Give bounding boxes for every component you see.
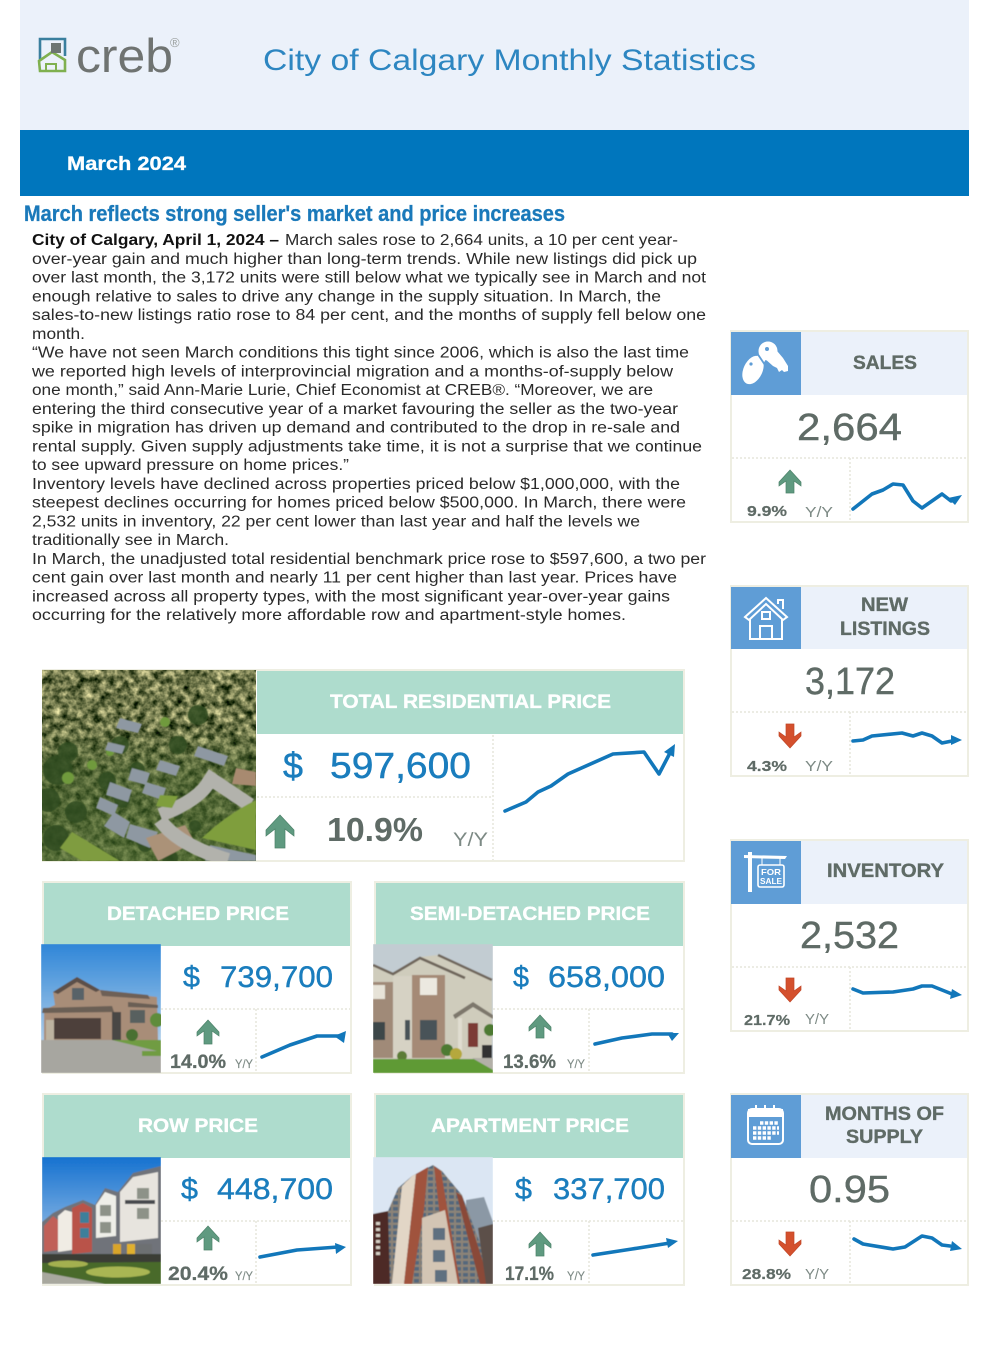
change value: 9.9%	[747, 503, 787, 520]
article text: increased across all property types, with the most significant year-over-year gains	[32, 588, 670, 605]
icon: up arrow	[197, 1226, 219, 1250]
icon: down arrow	[779, 1232, 801, 1256]
date bar	[20, 130, 969, 196]
change value: Y/Y	[567, 1269, 585, 1283]
change value	[168, 1264, 253, 1285]
panel: inventory	[731, 840, 968, 1031]
price value: $	[283, 745, 303, 786]
photo: apartment tower	[373, 1157, 493, 1284]
article text: we reported high levels of interprovincial migration and a months-of-supply below	[31, 363, 674, 380]
value: 0.95	[809, 1169, 890, 1211]
icon: up arrow	[779, 470, 801, 493]
panel: new listings	[731, 586, 968, 776]
sparkline	[854, 1236, 962, 1251]
value: 2,664	[797, 407, 902, 449]
article text	[31, 232, 707, 624]
heading: MONTHS OF	[825, 1104, 944, 1125]
value: 3,172	[805, 661, 895, 703]
article text: cent gain over last month and nearly 11 per cent higher than last year. Prices have	[32, 570, 677, 586]
article text: occurring for the relatively more affordable row and apartment-style homes.	[32, 607, 626, 624]
article text: steepest declines occurring for homes priced below $500,000. In March, there were	[32, 494, 686, 512]
panel: row price	[42, 1094, 351, 1285]
price value: 597,600	[330, 745, 471, 786]
icon: up arrow	[197, 1020, 219, 1044]
heading: INVENTORY	[827, 861, 944, 882]
icon: for sale sign: SALE	[760, 876, 782, 886]
price value: 337,700	[553, 1173, 665, 1206]
article text: one month,” said Ann-Marie Lurie, Chief Economist at CREB®. “Moreover, we are	[32, 382, 653, 399]
photo: detached house	[41, 944, 164, 1073]
price value: $	[513, 961, 529, 994]
price value: $	[515, 1173, 532, 1206]
icon: down arrow	[779, 724, 801, 748]
heading: DETACHED PRICE	[107, 903, 289, 925]
article text: enough relative to sales to drive any change in the supply situation. In March, the	[32, 288, 661, 305]
report title: City of Calgary Monthly Statistics	[263, 44, 756, 77]
heading	[801, 587, 967, 649]
article text: “We have not seen March conditions this tight since 2006, which is also the last time	[32, 344, 689, 362]
heading: SALES	[853, 353, 917, 374]
article text: March sales rose to 2,664 units, a 10 per cent year-	[285, 232, 678, 249]
change value: 14.0%	[170, 1052, 226, 1073]
icon: for sale sign	[731, 841, 801, 904]
price value: 658,000	[548, 961, 665, 994]
heading	[801, 332, 967, 395]
article text: sales-to-new listings ratio rose to 84 per cent, and the months of supply fell below one	[32, 307, 706, 324]
value: 2,532	[800, 915, 899, 957]
icon: calendar	[731, 1095, 801, 1158]
icon: for sale sign: FOR	[761, 867, 781, 877]
heading: APARTMENT PRICE	[431, 1115, 629, 1137]
panel: detached price	[41, 882, 351, 1073]
heading: ROW PRICE	[138, 1115, 258, 1137]
change value	[742, 1266, 829, 1283]
change value: Y/Y	[235, 1269, 253, 1283]
change value: Y/Y	[805, 1266, 829, 1283]
sparkline	[853, 986, 962, 999]
change value	[170, 1052, 253, 1073]
change value: 13.6%	[503, 1052, 556, 1073]
article text: spike in migration has driven up demand and contributed to the drop in re-sale and	[32, 420, 680, 436]
panel: apartment price	[373, 1094, 684, 1285]
icon: keys	[731, 332, 801, 395]
article text: month.	[32, 326, 85, 343]
heading	[801, 841, 967, 904]
article text: over last month, the 3,172 units were still below what we typically see in March and not	[32, 270, 707, 286]
logo: creb: creb	[76, 29, 173, 82]
photo: semi-detached house	[373, 944, 496, 1073]
change value	[747, 503, 833, 521]
sparkline	[262, 1031, 346, 1057]
article text: City of Calgary, April 1, 2024 –	[32, 232, 279, 249]
change value: 21.7%	[744, 1012, 790, 1029]
sparkline	[595, 1033, 679, 1044]
sparkline	[505, 744, 675, 811]
change value: 17.1%	[505, 1264, 554, 1285]
sparkline	[853, 733, 962, 745]
article text: to see upward pressure on home prices.”	[32, 457, 349, 474]
sparkline	[853, 484, 962, 509]
logo: creb: ®	[170, 35, 180, 50]
sparkline	[260, 1243, 346, 1257]
heading	[257, 671, 683, 734]
price value	[283, 745, 471, 786]
price value: $	[181, 1173, 198, 1206]
heading: NEW	[861, 595, 908, 616]
logo: creb	[39, 29, 180, 82]
article text: over-year gain and much higher than long-term trends. While new listings did pick up	[32, 251, 697, 268]
article text: 2,532 units in inventory, 22 per cent lower than last year and half the levels we	[32, 513, 640, 530]
heading	[376, 883, 683, 946]
icon: up arrow	[529, 1232, 551, 1256]
heading: SUPPLY	[846, 1127, 923, 1148]
heading	[376, 1095, 683, 1158]
change value: 4.3%	[747, 758, 787, 775]
panel: total residential price	[36, 670, 684, 866]
change value	[744, 1011, 829, 1029]
photo: aerial neighbourhood	[36, 670, 256, 866]
change value: 28.8%	[742, 1266, 791, 1283]
icon: house	[731, 587, 801, 649]
heading: TOTAL RESIDENTIAL PRICE	[330, 691, 611, 713]
price value: 448,700	[217, 1173, 333, 1206]
change value	[505, 1264, 585, 1285]
headline: March reflects strong seller's market and price increases	[24, 201, 565, 226]
sparkline	[593, 1238, 678, 1255]
change value: Y/Y	[805, 504, 833, 521]
change value: Y/Y	[453, 830, 488, 851]
change value: 20.4%	[168, 1264, 228, 1285]
change value	[747, 758, 833, 775]
article text: entering the third consecutive year of a market favouring the seller as the two-year	[32, 401, 678, 418]
price value: $	[183, 961, 200, 994]
price value: 739,700	[220, 961, 333, 994]
change value: Y/Y	[567, 1057, 585, 1071]
photo: row houses	[42, 1157, 161, 1284]
change value: 10.9%	[327, 811, 423, 848]
heading	[801, 1095, 967, 1158]
header band	[20, 0, 969, 130]
icon: up arrow	[529, 1015, 551, 1038]
date bar: March 2024	[67, 154, 186, 175]
icon: up arrow	[266, 815, 294, 848]
article text: In March, the unadjusted total residential benchmark price rose to $597,600, a two per	[32, 551, 706, 568]
article text: rental supply. Given supply adjustments take time, it is not a surprise that we continue	[32, 438, 702, 455]
panel: sales	[731, 331, 968, 522]
change value: Y/Y	[235, 1057, 253, 1071]
article text: Inventory levels have declined across properties priced below $1,000,000, with the	[32, 476, 680, 493]
change value	[503, 1052, 585, 1073]
change value: Y/Y	[805, 1011, 829, 1028]
change value	[327, 811, 488, 851]
panel: months of supply	[731, 1094, 968, 1285]
heading	[44, 1095, 350, 1158]
article text: traditionally see in March.	[32, 532, 229, 549]
icon: down arrow	[779, 978, 801, 1002]
change value: Y/Y	[805, 758, 833, 775]
heading	[44, 883, 350, 946]
heading: SEMI-DETACHED PRICE	[410, 903, 650, 925]
heading: LISTINGS	[840, 619, 930, 640]
panel: semi-detached price	[373, 882, 684, 1073]
